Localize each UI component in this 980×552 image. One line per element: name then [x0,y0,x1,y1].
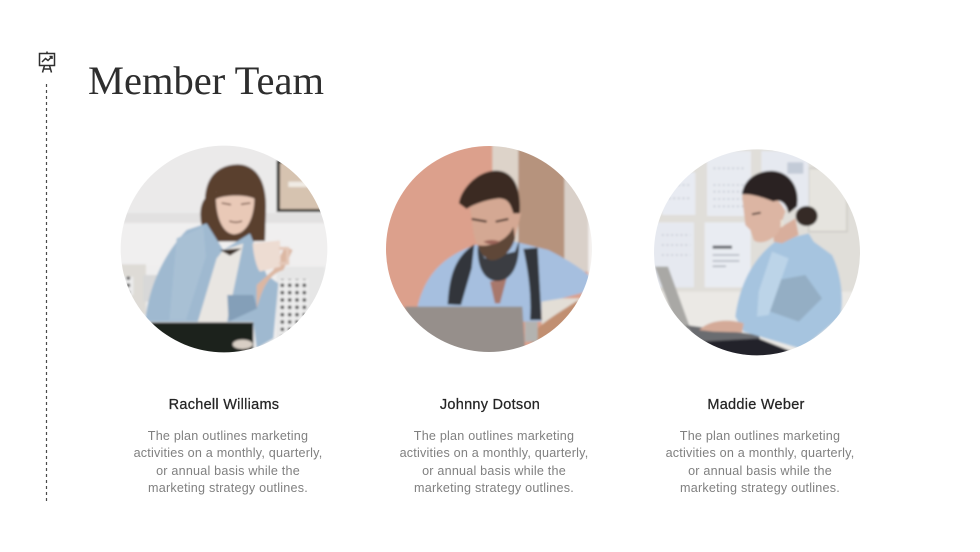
description: Johnny Dotson: marketing strategy outlines. [414,481,574,495]
name: Rachell Williams: Rachell Williams [169,397,279,413]
shirt [145,223,278,348]
face [216,191,254,234]
dark lap [704,338,790,356]
laptop [150,320,255,352]
photo: Maddie Weber [654,149,860,356]
laptop [404,305,526,352]
arm [257,247,293,308]
face [478,196,522,248]
description: Rachell Williams: activities on a monthly, quarterly, [134,446,322,460]
description: Rachell Williams [134,428,322,495]
description: Rachell Williams: The plan outlines marketing [148,428,308,442]
description: Maddie Weber: or annual basis while the [688,464,832,478]
timeline dashed line [46,84,48,501]
description: Johnny Dotson: activities on a monthly, quarterly, [400,446,588,460]
headphones [478,241,519,281]
description: Maddie Weber: The plan outlines marketing [680,428,840,442]
wall papers [707,151,751,216]
arm [532,300,578,342]
title: Member Team [88,58,324,103]
neck [490,278,507,303]
laptop [655,267,690,332]
description: Johnny Dotson [400,428,588,495]
description: Rachell Williams: or annual basis while the [156,464,300,478]
neck and face [774,218,799,243]
description: Maddie Weber [666,428,854,495]
frame [277,160,323,212]
icon: presentation board [38,52,56,73]
photo: Johnny Dotson [386,146,592,352]
description: Maddie Weber: activities on a monthly, quarterly, [666,446,854,460]
description: Rachell Williams: marketing strategy outlines. [148,481,308,495]
description: Maddie Weber: marketing strategy outlines. [680,481,840,495]
photo: Rachell Williams [120,146,328,352]
blouse [735,233,842,349]
backpack straps [448,244,474,305]
mug [253,240,281,272]
hair back [200,164,266,242]
name: Johnny Dotson: Johnny Dotson [440,397,540,413]
shirt [418,242,590,322]
hands [699,321,744,332]
hair [742,171,798,213]
name: Maddie Weber: Maddie Weber [707,397,805,413]
radiators [120,264,146,314]
hair [459,171,520,213]
description: Johnny Dotson: The plan outlines marketing [414,428,574,442]
description: Johnny Dotson: or annual basis while the [422,464,566,478]
